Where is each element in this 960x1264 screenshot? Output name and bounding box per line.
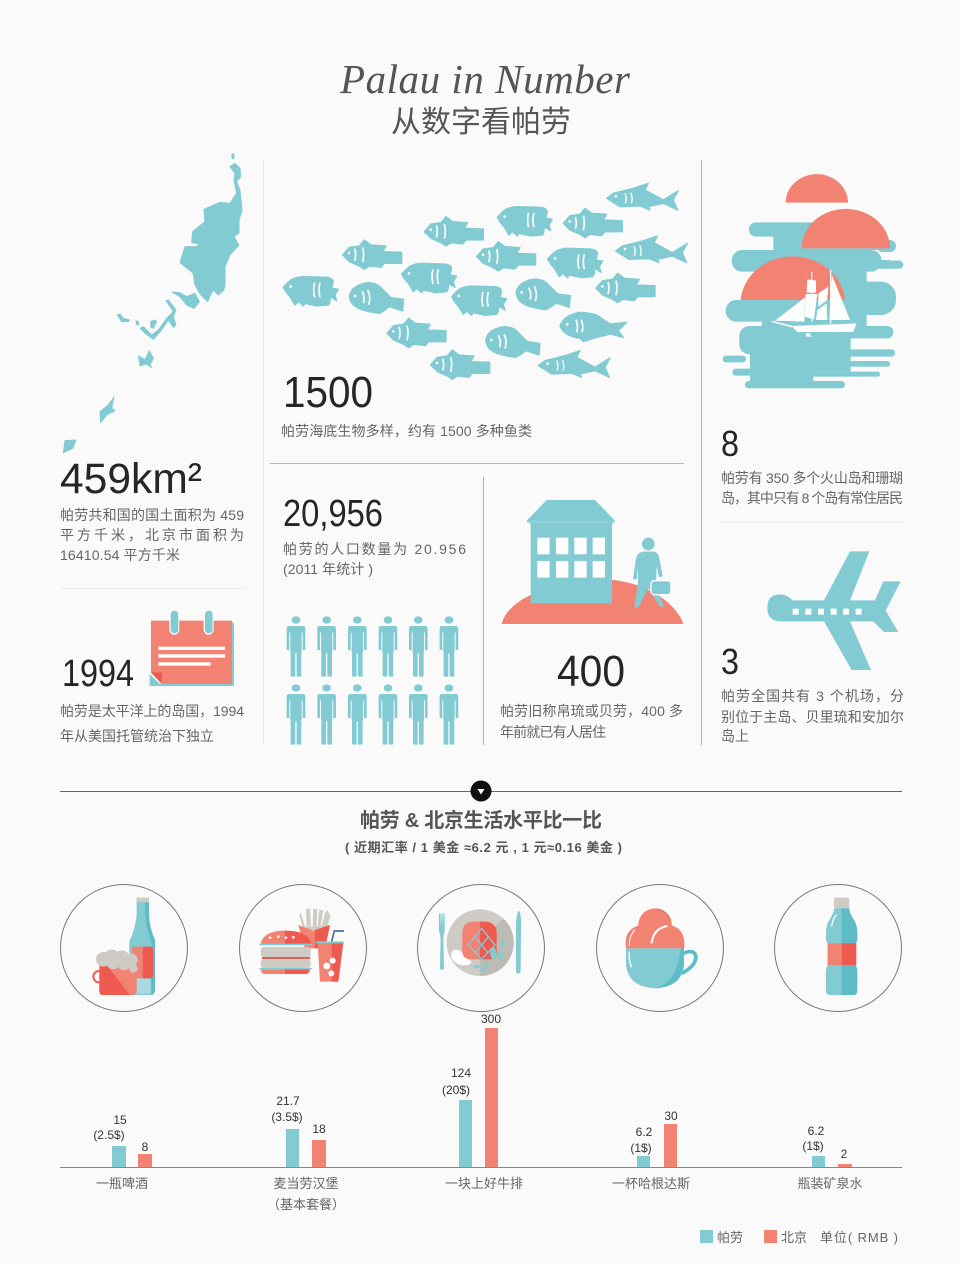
bars: steak: (20$) bbox=[442, 1083, 470, 1097]
text: population description: (2011 年统计 ) bbox=[283, 561, 373, 577]
bars: ice cream: 30 bbox=[664, 1109, 678, 1123]
panel: airports bbox=[721, 551, 904, 744]
text: airports description: 帕劳全国共有 3 个机场，分 bbox=[721, 688, 904, 704]
bars: steak: 300 bbox=[481, 1012, 501, 1026]
category labels: 瓶装矿泉水 bbox=[797, 1176, 863, 1191]
text: population description bbox=[283, 541, 466, 577]
title: Chinese: 从数字看帕劳 bbox=[391, 106, 571, 139]
text: islands description: 帕劳有 350 多个火山岛和珊瑚 bbox=[721, 470, 903, 486]
bar chart: prices bbox=[60, 1012, 902, 1212]
bars: water: 6.2 bbox=[808, 1124, 825, 1138]
text: fish description: 帕劳海底生物多样，约有 1500 多种鱼类 bbox=[281, 423, 532, 439]
panel: population bbox=[283, 493, 466, 745]
bars: ice cream: 6.2 bbox=[636, 1125, 653, 1139]
panel: land area bbox=[60, 154, 244, 563]
text: independence description: 年从美国托管统治下独立 bbox=[60, 728, 214, 744]
text: area description: 平方千米，北京市面积为 bbox=[60, 527, 244, 543]
text: history description: 帕劳旧称帛琉或贝劳，400 多 bbox=[500, 703, 683, 719]
bars: water bbox=[802, 1124, 852, 1167]
text: area description bbox=[60, 507, 244, 563]
icon: calendar bbox=[150, 610, 234, 686]
number: 1500: 1500 bbox=[283, 368, 373, 417]
bars: burger: (3.5$) bbox=[271, 1110, 303, 1124]
panel: history bbox=[500, 500, 683, 740]
bars: ice cream: (1$) bbox=[630, 1141, 652, 1155]
bars: ice cream bbox=[630, 1109, 678, 1167]
bars: steak: 124 bbox=[451, 1066, 471, 1080]
number: 3: 3 bbox=[721, 641, 739, 682]
icon: people pictogram bbox=[287, 616, 458, 745]
bars: burger: 18 bbox=[312, 1122, 326, 1136]
category labels: 一杯哈根达斯 bbox=[612, 1176, 690, 1191]
text: history description: 年前就已有人居住 bbox=[500, 724, 606, 740]
subheading: exchange rate: ( 近期汇率 / 1 美金 ≈6.2 元 , 1 元≈0.16 美金 ) bbox=[345, 840, 622, 855]
bars: steak bbox=[442, 1012, 501, 1167]
number: 8: 8 bbox=[721, 423, 739, 464]
text: population description: 帕劳的人口数量为 20.956 bbox=[283, 541, 466, 557]
text: islands description bbox=[721, 470, 903, 506]
icon: steak plate bbox=[418, 884, 544, 1012]
text: independence description: 帕劳是太平洋上的岛国，1994 bbox=[60, 703, 244, 719]
map of Palau bbox=[63, 154, 242, 453]
bars: burger bbox=[271, 1094, 326, 1167]
text: history description bbox=[500, 703, 683, 740]
category labels: （基本套餐） bbox=[267, 1197, 345, 1212]
bars: beer bbox=[93, 1113, 152, 1167]
legend bbox=[700, 1230, 898, 1245]
title bbox=[339, 56, 631, 139]
panel: fish species bbox=[281, 183, 687, 439]
title: English script: Palau in Number bbox=[339, 56, 631, 102]
panel: islands bbox=[721, 174, 903, 506]
bars: water: (1$) bbox=[802, 1139, 824, 1153]
icon: school of fish bbox=[283, 183, 687, 379]
icon: ice cream cup bbox=[596, 884, 724, 1012]
number: 1994: 1994 bbox=[62, 653, 134, 695]
icon: burger, fries and soda bbox=[240, 884, 366, 1012]
panel: 1994 independence bbox=[60, 610, 244, 744]
bars: beer: 8 bbox=[142, 1140, 149, 1154]
category labels: 麦当劳汉堡 bbox=[273, 1176, 339, 1191]
divider with marker bbox=[60, 780, 902, 802]
heading: cost of living comparison: 帕劳 & 北京生活水平比一比 bbox=[360, 808, 602, 832]
legend: 帕劳 bbox=[717, 1230, 743, 1245]
category labels: 一瓶啤酒 bbox=[96, 1176, 148, 1191]
text: islands description: 岛，其中只有 8 个岛有常住居民 bbox=[721, 490, 903, 506]
icon: airplane bbox=[767, 551, 901, 670]
legend: 单位( RMB ) bbox=[820, 1230, 898, 1245]
text: airports description: 别位于主岛、贝里琉和安加尔 bbox=[721, 709, 904, 725]
icon: beer bbox=[60, 884, 188, 1012]
bars: beer: (2.5$) bbox=[93, 1128, 125, 1142]
icon: ship, suns and clouds bbox=[723, 174, 903, 388]
text: area description: 帕劳共和国的国土面积为 459 bbox=[60, 507, 244, 523]
icon: water bottle bbox=[774, 884, 902, 1012]
legend: 北京 bbox=[781, 1230, 807, 1245]
category labels: 一块上好牛排 bbox=[445, 1176, 523, 1191]
bars: burger: 21.7 bbox=[276, 1094, 300, 1108]
number: 400: 400 bbox=[557, 647, 625, 696]
icons row: food and drinks bbox=[60, 884, 902, 1012]
number: 20,956: 20,956 bbox=[283, 493, 383, 535]
number: 459km²: 459km² bbox=[60, 455, 202, 503]
text: independence description bbox=[60, 703, 244, 744]
text: airports description bbox=[721, 688, 904, 744]
category labels bbox=[96, 1176, 863, 1212]
text: airports description: 岛上 bbox=[721, 728, 749, 744]
text: area description: 16410.54 平方千米 bbox=[60, 547, 180, 563]
bars: beer: 15 bbox=[113, 1113, 127, 1127]
icon: building and walking person bbox=[502, 500, 683, 624]
heading: cost of living comparison bbox=[345, 808, 622, 855]
bars: water: 2 bbox=[841, 1147, 848, 1161]
